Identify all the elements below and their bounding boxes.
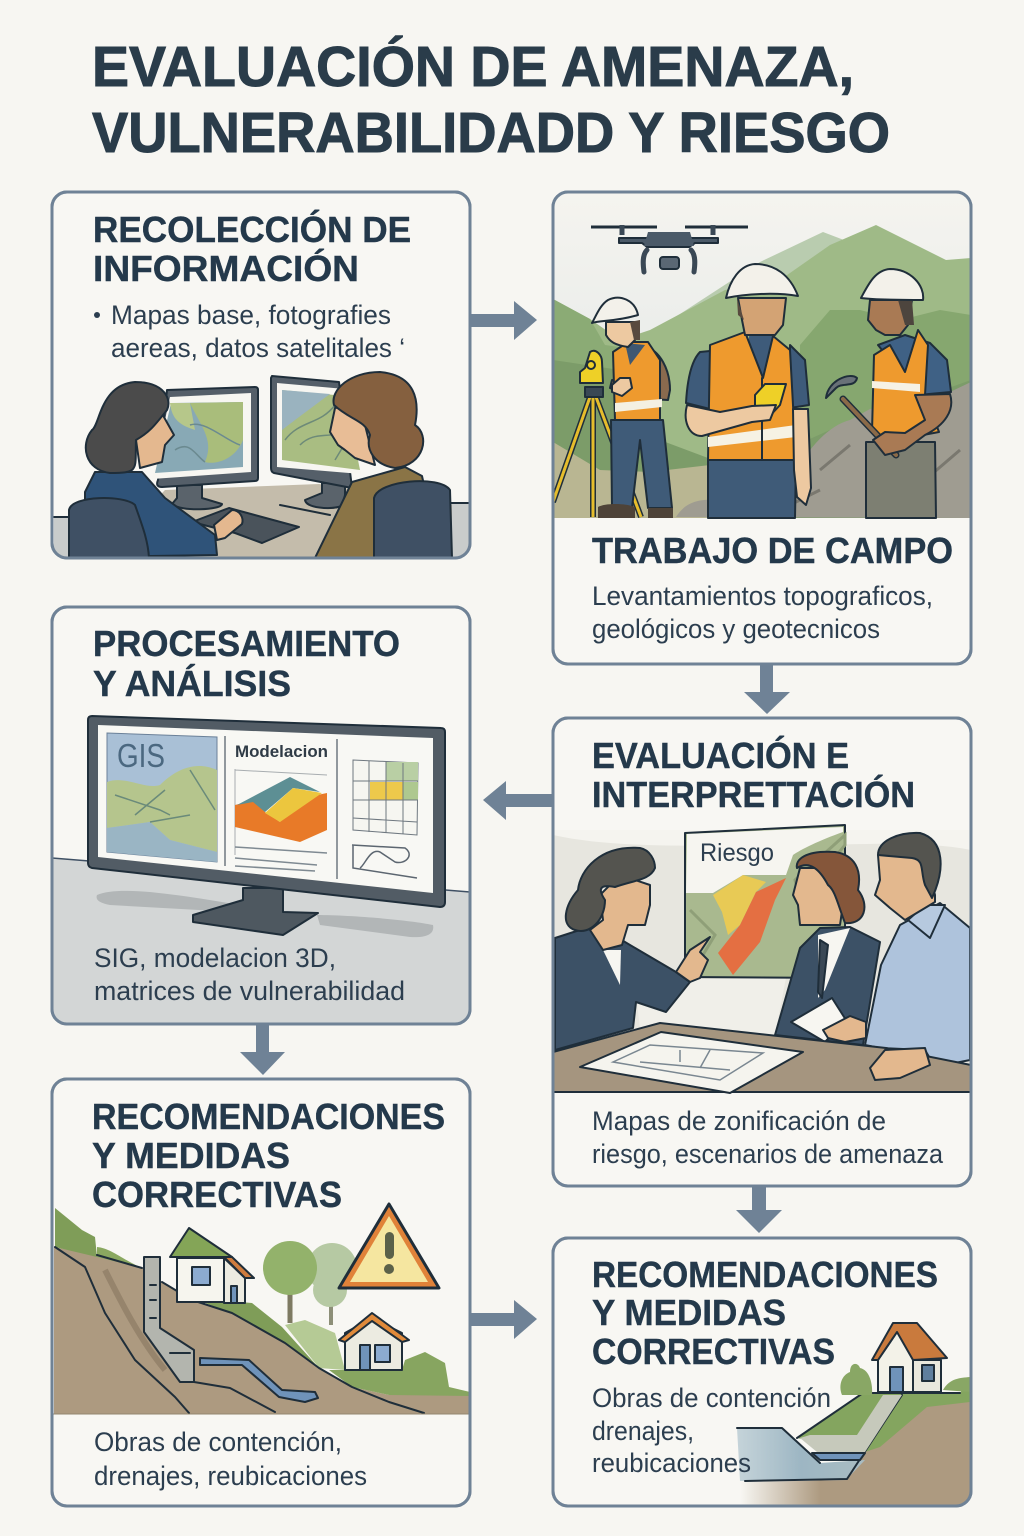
heading: recomendaciones derecha: RECOMENDACIONES <box>592 1254 938 1295</box>
title <box>92 35 890 165</box>
blueprint <box>580 1032 803 1093</box>
panel: procesamiento y análisis <box>52 607 470 1024</box>
retaining wall <box>144 1257 194 1382</box>
central worker <box>686 264 811 518</box>
text: trabajo de campo body: Levantamientos topograficos, <box>592 581 933 611</box>
right monitor <box>271 376 361 508</box>
text: recomendaciones izquierda body <box>94 1427 367 1491</box>
text: evaluación body: Mapas de zonificación de <box>592 1106 886 1136</box>
presenter <box>555 848 710 1050</box>
woman centre <box>775 852 880 1045</box>
heading: evaluación: EVALUACIÓN E <box>592 734 849 776</box>
title: VULNERABILIDADD Y RIESGO <box>92 101 890 165</box>
basin <box>737 1428 865 1481</box>
panel: recomendaciones derecha <box>553 1238 971 1506</box>
3D model <box>235 742 328 871</box>
arrow: campo to evaluación <box>744 664 790 714</box>
text: procesamiento body <box>94 943 405 1006</box>
hand on table <box>870 1048 930 1080</box>
house right <box>339 1313 409 1370</box>
text: recolección body <box>94 300 405 363</box>
risk map: Riesgo <box>700 839 774 867</box>
drone <box>591 225 748 272</box>
arrow: recomendaciones izquierda to derecha <box>471 1300 537 1339</box>
illustration: field crew <box>553 192 971 518</box>
risk map <box>685 825 845 978</box>
text: recolección body: Mapas base, fotografies <box>111 300 391 330</box>
house left <box>170 1228 254 1303</box>
GIS map: GIS <box>117 737 165 774</box>
icon: warning triangle <box>339 1204 439 1288</box>
panel: recolección de información <box>52 192 470 558</box>
tripod <box>553 351 641 517</box>
text: evaluación body <box>592 1106 944 1169</box>
text: recomendaciones derecha body: drenajes, <box>592 1416 694 1446</box>
GIS map <box>107 733 217 862</box>
bushes <box>840 1364 872 1395</box>
heading: evaluación <box>592 734 915 815</box>
left person <box>69 382 243 558</box>
heading: recolección <box>93 208 411 289</box>
heading: recomendaciones izquierda: RECOMENDACIONES <box>92 1096 445 1137</box>
text: evaluación body: riesgo, escenarios de amenaza <box>592 1139 944 1169</box>
text: trabajo de campo body: geológicos y geotecnicos <box>592 614 880 644</box>
3D model: Modelacion <box>235 742 328 761</box>
heading: trabajo de campo: TRABAJO DE CAMPO <box>592 530 953 571</box>
heading: evaluación: INTERPRETTACIÓN <box>592 773 915 815</box>
arrow: evaluación to procesamiento <box>483 781 553 820</box>
trees <box>263 1241 357 1325</box>
text: trabajo de campo body <box>592 581 933 644</box>
heading: recomendaciones derecha <box>592 1254 938 1372</box>
arrow: evaluación to recomendaciones derecha <box>736 1186 782 1233</box>
heading: recolección: RECOLECCIÓN DE <box>93 208 411 250</box>
text: recolección body: aereas, datos satelitales ‘ <box>111 333 405 363</box>
title: EVALUACIÓN DE AMENAZA, <box>92 35 854 99</box>
illustration: GIS monitor <box>88 716 445 935</box>
table <box>553 1023 971 1092</box>
heading: recomendaciones izquierda: CORRECTIVAS <box>92 1174 342 1215</box>
right person <box>315 372 452 558</box>
heading: recomendaciones derecha: CORRECTIVAS <box>592 1331 835 1372</box>
surveyor <box>592 298 673 518</box>
text: procesamiento body: matrices de vulnerabilidad <box>94 976 405 1006</box>
arrow: procesamiento to recomendaciones <box>240 1024 285 1075</box>
text: recomendaciones izquierda body: drenajes, reubicaciones <box>94 1461 367 1491</box>
heading: procesamiento: PROCESAMIENTO <box>93 623 400 664</box>
man right <box>865 833 970 1067</box>
concrete channel <box>800 1395 902 1452</box>
left monitor <box>152 387 258 509</box>
heading: recomendaciones izquierda <box>92 1096 445 1215</box>
heading: recolección: INFORMACIÓN <box>93 247 359 289</box>
heading: procesamiento <box>93 623 400 704</box>
illustration: house and drainage <box>737 1323 970 1506</box>
panel: trabajo de campo <box>553 192 971 664</box>
panel: recomendaciones izquierda <box>52 1079 470 1506</box>
panel: evaluación e interpretación <box>553 718 971 1186</box>
illustration: risk meeting <box>553 825 971 1093</box>
drain pipe <box>200 1358 318 1402</box>
text: recomendaciones izquierda body: Obras de contención, <box>94 1427 342 1457</box>
matrix chart <box>352 760 418 878</box>
arrow: recolección to campo <box>471 301 537 340</box>
keyboard <box>192 508 299 543</box>
text: procesamiento body: SIG, modelacion 3D, <box>94 943 336 973</box>
heading: recomendaciones derecha: Y MEDIDAS <box>592 1292 786 1333</box>
right worker <box>826 269 951 518</box>
text: recomendaciones derecha body: Obras de contención <box>592 1383 831 1413</box>
text: recomendaciones derecha body: reubicaciones <box>592 1448 751 1478</box>
text: recomendaciones derecha body <box>592 1383 831 1478</box>
house <box>872 1323 947 1392</box>
heading: procesamiento: Y ANÁLISIS <box>93 663 291 704</box>
illustration: slope with retaining works <box>52 1208 470 1414</box>
heading: recomendaciones izquierda: Y MEDIDAS <box>92 1135 290 1176</box>
illustration: analysts at monitors <box>54 372 470 558</box>
